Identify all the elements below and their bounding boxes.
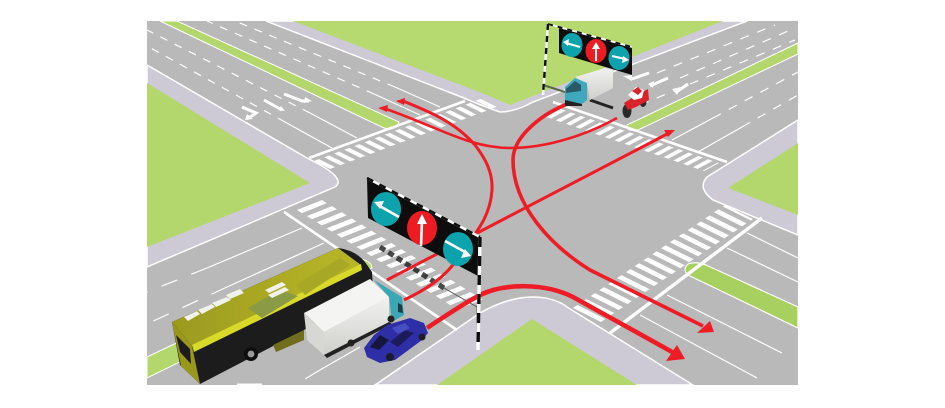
road arrows [237, 73, 688, 385]
grass: north-west [147, 83, 310, 247]
vehicle: top truck [565, 68, 613, 106]
icon: right arrow disc [443, 232, 473, 266]
road arrow heads [245, 75, 681, 120]
panel: north sidewalk [266, 21, 747, 112]
stop lines [284, 101, 762, 333]
panel: south sidewalk [375, 297, 693, 385]
vehicle: motorcycle [622, 87, 649, 118]
route: straight to east [387, 133, 669, 280]
icon: left arrow disc [371, 192, 401, 226]
sign: large overhead arrows sign [367, 178, 480, 350]
icon: right arrow disc [608, 46, 630, 70]
crosswalk stripes [310, 101, 739, 315]
panel: east sidewalk [703, 120, 798, 235]
sign post [478, 237, 480, 350]
grass: east [728, 143, 798, 215]
panel: north-west sidewalk [147, 65, 338, 267]
route: truck left turn [513, 103, 703, 326]
median: north-east [627, 43, 798, 130]
median: north-west [160, 21, 399, 129]
grass: north [293, 21, 723, 105]
icon: straight arrow disc [586, 39, 606, 63]
route: right turn from west [427, 286, 674, 353]
icon: left arrow disc [562, 33, 582, 57]
sign: small overhead arrows sign [543, 24, 632, 95]
route: motorcycle to west [386, 109, 617, 148]
sign shadows [380, 85, 613, 350]
infographic: intersection scene [147, 21, 798, 385]
route arrows in red [386, 101, 703, 353]
vehicle: bus [172, 248, 373, 384]
lane markings [147, 21, 798, 385]
road surface and surroundings [147, 21, 798, 385]
bus roof panels [184, 282, 289, 321]
median: south-west [147, 258, 372, 378]
sign top strip [367, 178, 480, 237]
route: left turn from centre lane [403, 101, 492, 300]
grass: south [437, 319, 637, 385]
vehicle: bottom truck [304, 279, 404, 358]
arrow heads [378, 98, 714, 361]
vehicle: blue car [364, 318, 428, 363]
sign top strip [548, 24, 632, 47]
sign post [543, 24, 548, 95]
median: south-east [685, 263, 798, 328]
icon: straight arrow disc [407, 211, 437, 246]
